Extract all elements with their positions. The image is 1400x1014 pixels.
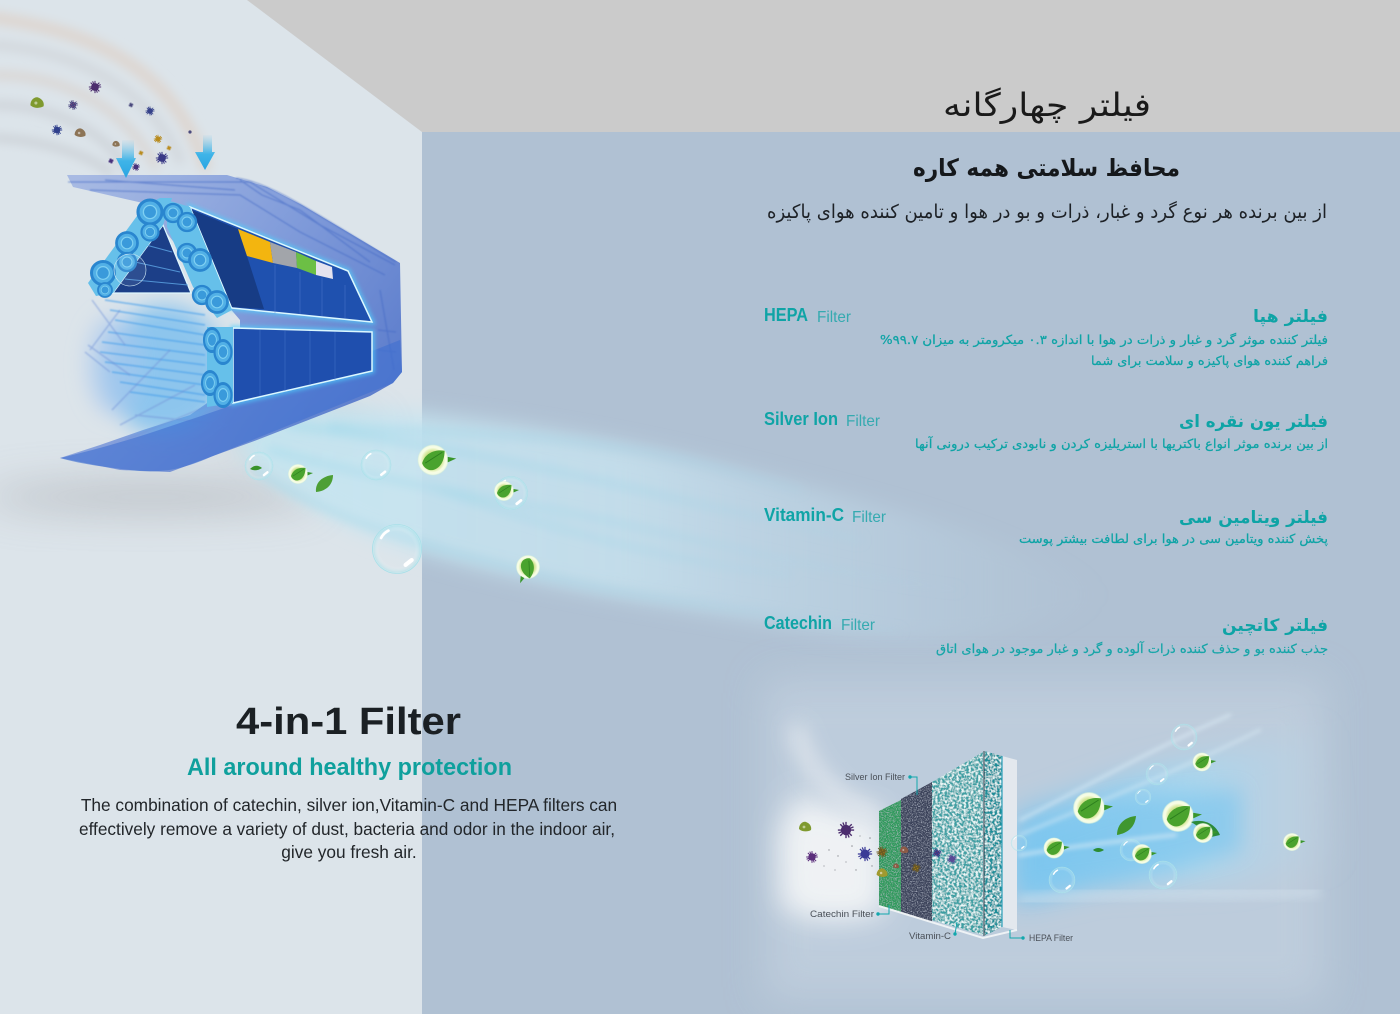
callout: HEPA Filter — [1010, 930, 1073, 944]
polluted air streams — [0, 18, 205, 172]
lower filter panel — [233, 328, 372, 403]
filter item: Silver Ion: Filter — [846, 413, 881, 430]
intro line: Persian: از بین برنده هر نوع گرد و غبار، ذرات و بو در هوا و تامین کننده هوای پاکیزه — [767, 200, 1327, 223]
filter item: Silver Ion: فیلتر یون نقره ای — [1179, 412, 1328, 432]
filter item: Vitamin-C: Vitamin-C — [764, 505, 844, 525]
coil water droplet bubble — [114, 254, 146, 286]
lower panel mesh lines — [260, 330, 335, 396]
icon: intake arrow right — [195, 135, 215, 170]
unit outer translucent shell — [60, 175, 402, 472]
filter block: vitamin C layer — [932, 752, 983, 935]
filter item: HEPA: فیلتر کننده موثر گرد و غبار و ذرات در هوا با اندازه ۰.۳ میکرومتر به میزان ۹۹.۷% — [880, 332, 1328, 348]
filter block: HEPA white side — [1002, 756, 1017, 930]
filter item: Catechin: جذب کننده بو و حذف کننده ذرات آلوده و گرد و غبار موجود در هوای اتاق — [936, 641, 1328, 657]
filter item: Vitamin-C — [764, 505, 1329, 547]
icon: intake arrow left — [116, 140, 136, 178]
filter item: HEPA — [764, 305, 1328, 369]
filter item: Vitamin-C: فیلتر ویتامین سی — [1179, 508, 1328, 528]
clean-air bubbles and leaves — [245, 444, 544, 589]
filter item: Silver Ion: Silver Ion — [764, 409, 838, 429]
filter item: HEPA: Filter — [817, 309, 852, 326]
filter item: HEPA: فراهم کننده هوای پاکیزه و سلامت برای شما — [1091, 353, 1328, 369]
callout: Silver Ion Filter — [845, 772, 917, 795]
filter colour strip: yellow, grey, green, white — [238, 229, 333, 279]
background: left wall — [0, 0, 422, 1014]
airborne germs and dust — [30, 81, 192, 171]
filter list — [764, 305, 1329, 657]
diagram polluted air fog — [778, 725, 885, 921]
filter item: Vitamin-C: پخش کننده ویتامین سی در هوا برای لطافت بیشتر پوست — [1019, 531, 1329, 547]
triangular evaporator interior — [113, 225, 191, 293]
callout: Catechin Filter — [810, 905, 889, 920]
diagram soft background — [765, 680, 1325, 1000]
upper filter panel glow — [190, 207, 372, 322]
filter item: Catechin — [764, 613, 1328, 657]
callout: Vitamin-C: Vitamin-C — [909, 931, 951, 942]
fan blades and louvres — [100, 300, 205, 402]
filter item: Vitamin-C: Filter — [852, 509, 887, 526]
filter item: Catechin: Catechin — [764, 613, 832, 633]
English paragraph — [79, 795, 617, 862]
callout: HEPA Filter: HEPA Filter — [1029, 933, 1073, 944]
filter item: Catechin: فیلتر کاتچین — [1222, 616, 1328, 636]
callout: Catechin Filter: Catechin Filter — [810, 909, 874, 920]
evaporator coil bands — [88, 198, 233, 407]
diagram bubbles and leaves — [1011, 724, 1306, 893]
background: grey ceiling band — [247, 0, 1400, 132]
icon: air conditioner indoor unit cutaway — [60, 175, 402, 472]
filter item: Silver Ion — [764, 409, 1328, 452]
upper filter panel — [190, 207, 372, 322]
English subheading: All around healthy protection — [187, 754, 512, 781]
filter block: catechin layer — [879, 800, 901, 913]
shell bottom lip — [60, 340, 402, 471]
diagram clean air flow — [1015, 715, 1335, 905]
filter item: Catechin: Filter — [841, 617, 876, 634]
dark upper filter area — [192, 210, 264, 309]
clean airflow stream — [235, 405, 1110, 641]
filter item: Silver Ion: از بین برنده موثر انواع باکتریها با استریلیزه کردن و نابودی ترکیب درونی آنها — [915, 436, 1328, 452]
fan and louvre blur — [86, 305, 227, 435]
shell top inner lines — [68, 178, 396, 370]
background: right panel — [422, 132, 1400, 1014]
English paragraph: The combination of catechin, silver ion,Vitamin-C and HEPA filters can — [81, 795, 617, 815]
diagram germs — [799, 822, 957, 877]
diagram dust scatter — [823, 835, 873, 871]
filter item: HEPA: فیلتر هپا — [1253, 307, 1328, 327]
title: Persian: فیلتر چهارگانه — [943, 86, 1151, 124]
lower filter panel glow — [233, 328, 372, 403]
filter item: HEPA: HEPA — [764, 305, 808, 325]
callout: Vitamin-C — [909, 922, 957, 942]
English paragraph: effectively remove a variety of dust, bacteria and odor in the indoor air, — [79, 819, 615, 839]
upper panel mesh lines — [275, 265, 345, 318]
filter block: HEPA teal layer — [984, 751, 1002, 936]
callout: Silver Ion Filter: Silver Ion Filter — [845, 772, 905, 783]
filter block edges — [1001, 756, 1003, 927]
coil tubes — [92, 200, 232, 406]
English heading: 4-in-1 Filter — [236, 701, 461, 743]
English paragraph: give you fresh air. — [281, 842, 417, 862]
soft shadow under indoor unit — [0, 416, 380, 513]
diagram: four-layer filter illustration — [765, 680, 1335, 1000]
filter block: silver ion layer — [901, 782, 932, 922]
subtitle: Persian: محافظ سلامتی همه کاره — [913, 154, 1180, 182]
